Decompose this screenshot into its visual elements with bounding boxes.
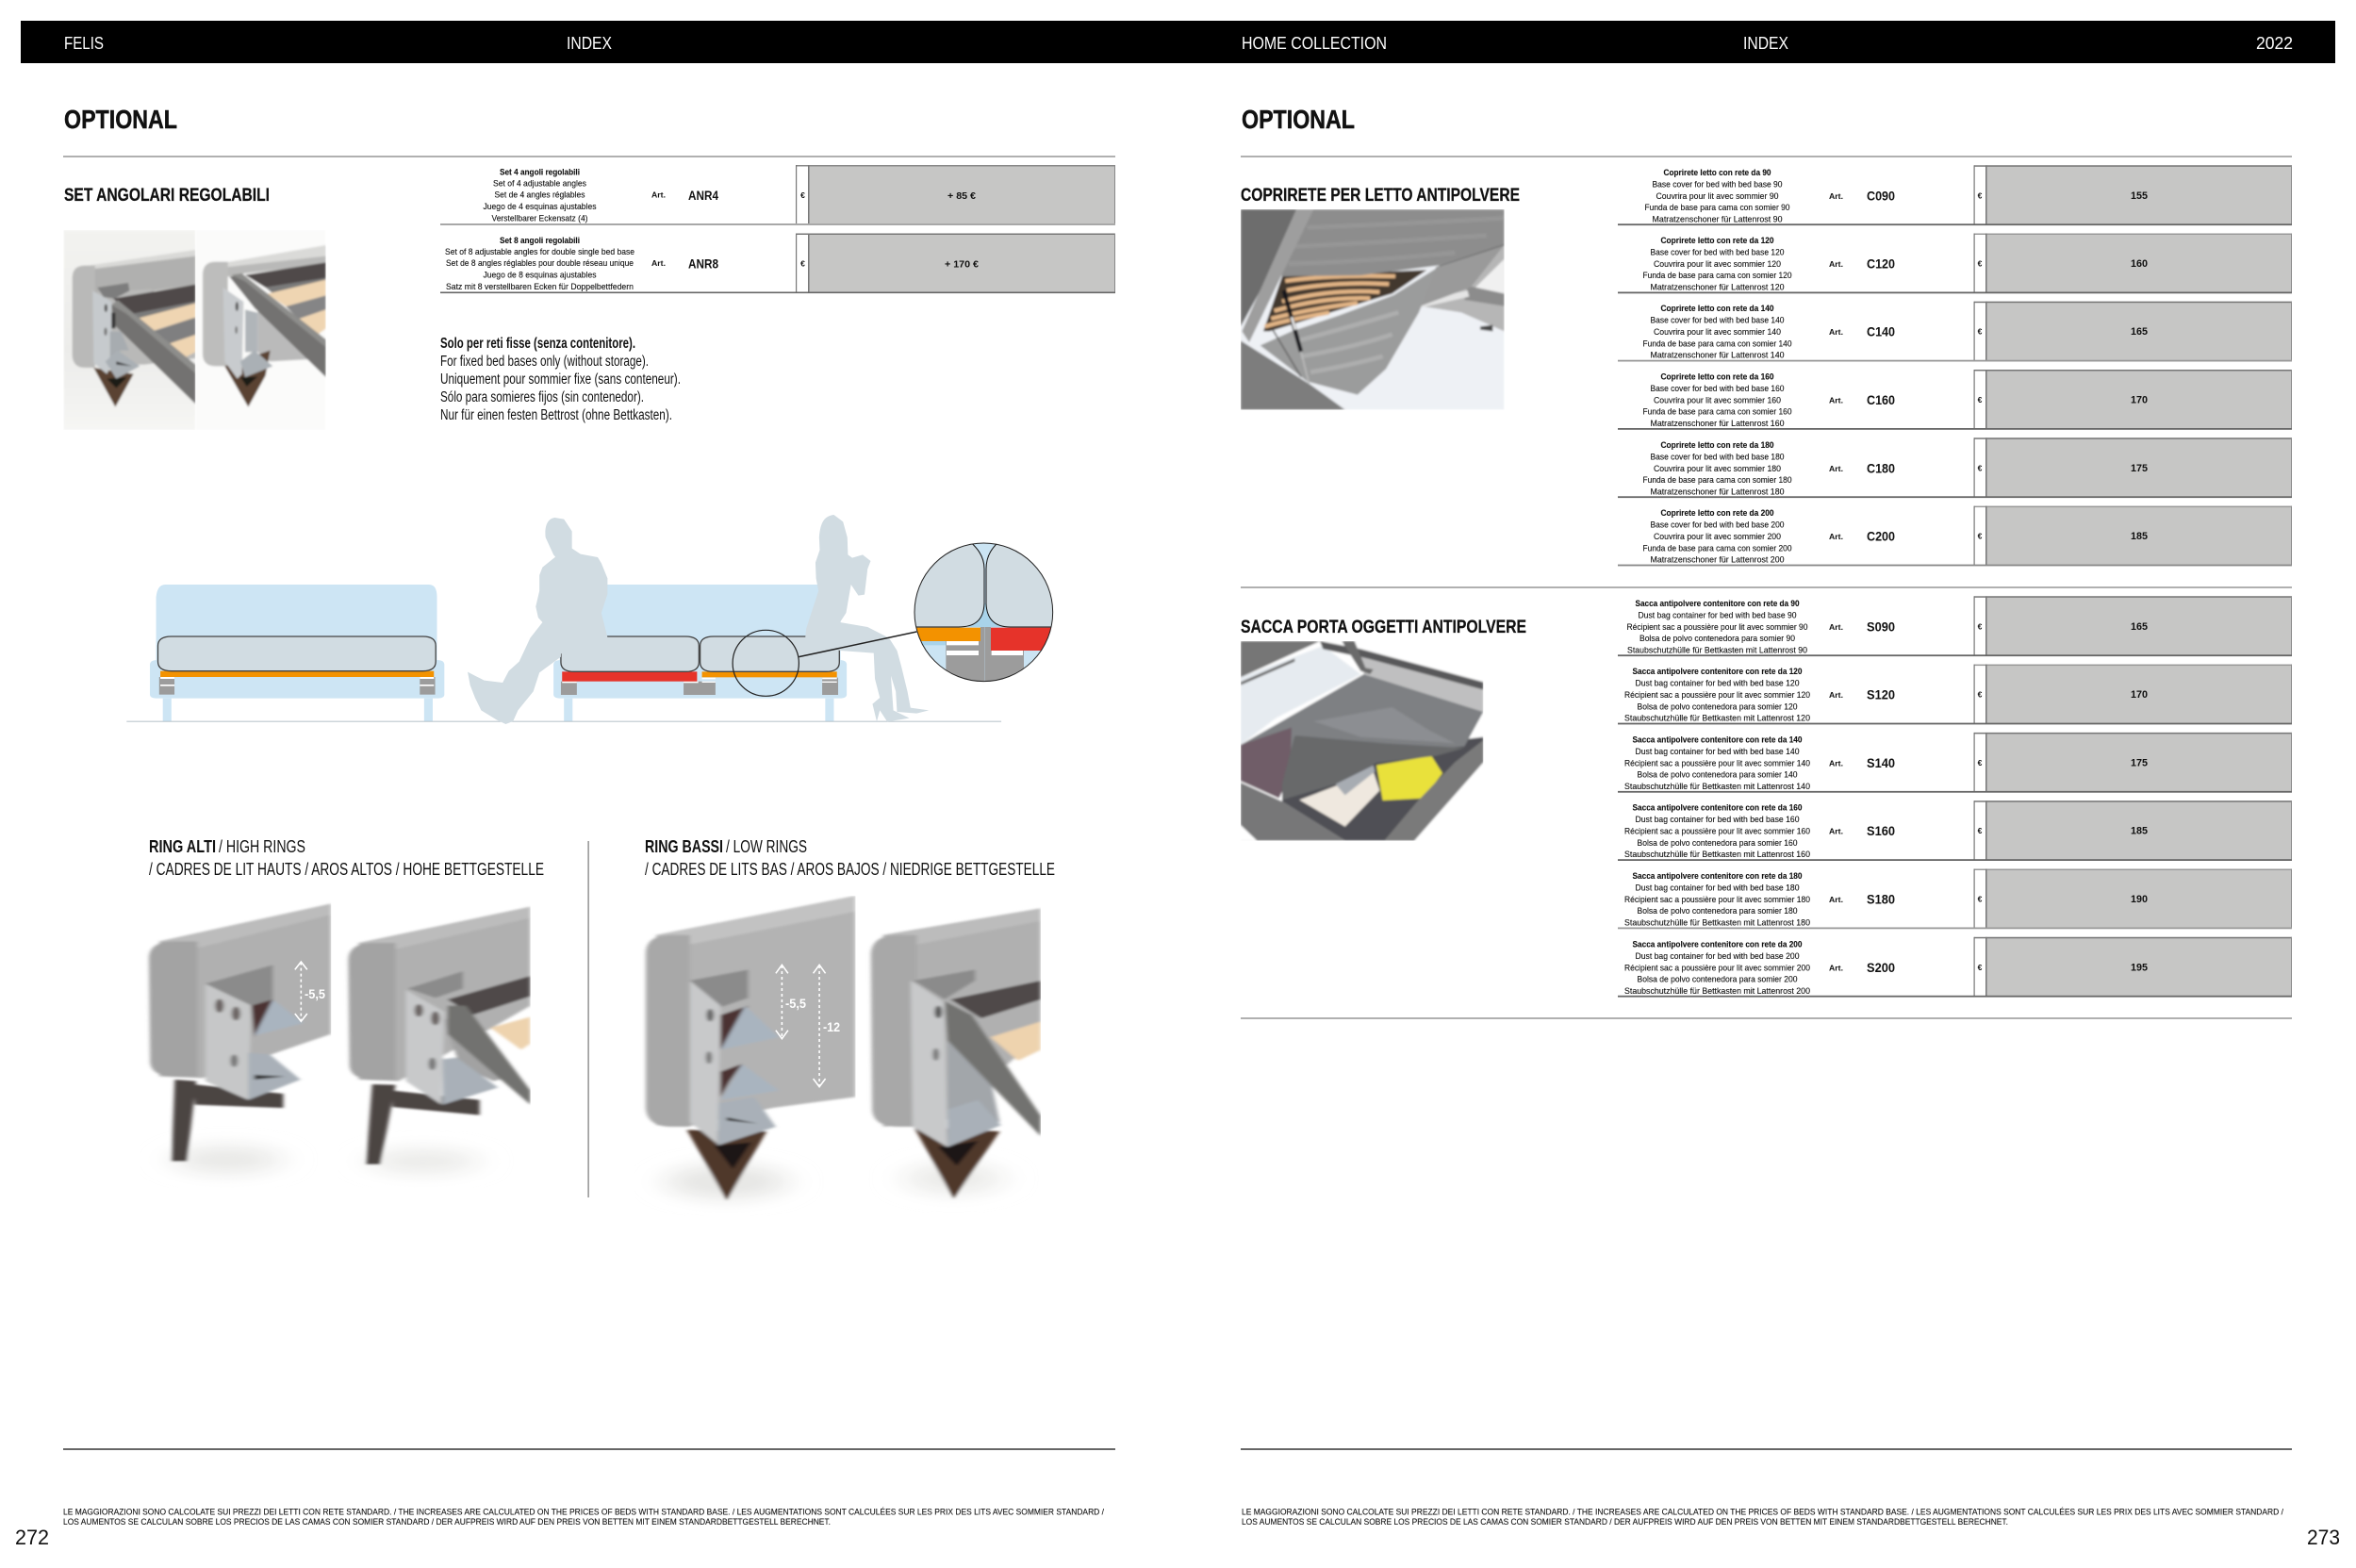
row: S200: S200 bbox=[1867, 960, 1895, 975]
header bar: HOME COLLECTION bbox=[1242, 34, 1387, 53]
row: S090: Art. bbox=[1829, 622, 1843, 632]
row: C180: Coprirete letto con rete da 180 bbox=[1661, 440, 1774, 451]
row: S180: S180 bbox=[1867, 892, 1895, 907]
heading: set angolari regolabili: SET ANGOLARI REGOLABILI bbox=[64, 186, 270, 206]
row: S120: Récipient sac a poussière pour lit avec sommier 120 bbox=[1624, 690, 1810, 701]
row: C180: Art. bbox=[1829, 464, 1843, 473]
row: ANR8: Satz mit 8 verstellbaren Ecken für Doppelbettfedern bbox=[446, 282, 634, 292]
table: sacca bbox=[1618, 596, 2292, 998]
row: S120: Art. bbox=[1829, 690, 1843, 700]
photos: ring brackets bbox=[149, 896, 1041, 1200]
row: S200: Bolsa de polvo contenedora para somier 200 bbox=[1637, 974, 1797, 984]
text block: fixed bed bases note: Uniquement pour sommier fixe (sans conteneur). bbox=[440, 371, 681, 388]
text block: fixed bed bases note: For fixed bed bases only (without storage). bbox=[440, 354, 649, 370]
row: S120: Bolsa de polvo contenedora para somier 120 bbox=[1637, 701, 1797, 712]
row: S140 bbox=[1618, 733, 2292, 793]
row: S140: Sacca antipolvere contenitore con rete da 140 bbox=[1633, 734, 1803, 745]
row: S090: Récipient sac a poussière pour lit avec sommier 90 bbox=[1627, 622, 1808, 633]
row: C090: Coprirete letto con rete da 90 bbox=[1663, 168, 1771, 178]
row: C090: Base cover for bed with bed base 90 bbox=[1652, 179, 1782, 190]
photo: adjustable angle brackets bbox=[63, 230, 326, 430]
row: C090 bbox=[1618, 165, 2292, 225]
row: C120: 160 bbox=[2131, 258, 2148, 270]
photo: low ring, with frame bbox=[871, 908, 1041, 1199]
row: C090: Matratzenschoner für Lattenrost 90 bbox=[1652, 214, 1782, 224]
row: S090: Bolsa de polvo contenedora para somier 90 bbox=[1639, 634, 1795, 644]
row: C140 bbox=[1618, 302, 2292, 362]
row: C160: Coprirete letto con rete da 160 bbox=[1661, 371, 1774, 383]
table: coprirete bbox=[1618, 165, 2292, 566]
row: S180: Bolsa de polvo contenedora para somier 180 bbox=[1637, 906, 1797, 916]
magnifier: small circle bbox=[733, 630, 799, 696]
row: S090 bbox=[1618, 596, 2292, 656]
row: C180: C180 bbox=[1867, 460, 1895, 475]
silhouette: woman bbox=[805, 515, 929, 721]
row: ANR4: € bbox=[800, 190, 805, 200]
row: C140: Coprirete letto con rete da 140 bbox=[1661, 304, 1774, 314]
row: S140: Récipient sac a poussière pour lit avec sommier 140 bbox=[1624, 758, 1810, 768]
row: S160: Dust bag container for bed with bed base 160 bbox=[1635, 815, 1799, 825]
row: S090: 165 bbox=[2131, 621, 2148, 633]
text block: fixed bed bases note bbox=[440, 336, 681, 423]
row: S140: S140 bbox=[1867, 755, 1895, 770]
row: C120: Funda de base para cama con somier 120 bbox=[1642, 271, 1791, 281]
heading: ring alti: / HIGH RINGS bbox=[219, 837, 305, 856]
page number 273: 273 bbox=[2307, 1526, 2340, 1549]
row: S120: Staubschutzhülle für Bettkasten mit Lattenrost 120 bbox=[1624, 714, 1810, 724]
photo: low ring, bracket bbox=[646, 896, 855, 1200]
row: C120: Art. bbox=[1829, 259, 1843, 269]
row: S180: € bbox=[1978, 894, 1983, 903]
row: C140: € bbox=[1978, 327, 1983, 337]
footnote: right bbox=[1242, 1507, 2283, 1527]
heading: ring alti: RING ALTI bbox=[149, 837, 216, 856]
row: S120: € bbox=[1978, 690, 1983, 700]
row: S120: Dust bag container for bed with bed base 120 bbox=[1635, 679, 1799, 689]
row: C120: Coprirete letto con rete da 120 bbox=[1661, 236, 1774, 246]
row: S200: Sacca antipolvere contenitore con rete da 200 bbox=[1633, 939, 1803, 949]
header bar: INDEX bbox=[1743, 34, 1788, 53]
label: -12 low ring: -12 bbox=[823, 1019, 840, 1034]
row: S160: Récipient sac a poussière pour lit avec sommier 160 bbox=[1624, 827, 1810, 837]
row: C090: Couvrira pour lit avec sommier 90 bbox=[1656, 191, 1778, 202]
row: S120 bbox=[1618, 665, 2292, 724]
row: C090: 155 bbox=[2131, 190, 2148, 202]
footnote: left: LE MAGGIORAZIONI SONO CALCOLATE SUI PREZZI DEI LETTI CON RETE STANDARD. / THE INCREASES ARE CALCULATED ON THE PRICES OF BEDS WITH STANDARD BASE. / LES AUGMENTATIONS SONT CALCULÉES SUR LES PRIX DES LITS AVEC SOMMIER STANDARD / bbox=[63, 1507, 1104, 1518]
row: C140: Matratzenschoner für Lattenrost 140 bbox=[1650, 351, 1784, 361]
row: S160: € bbox=[1978, 826, 1983, 835]
heading: sacca: SACCA PORTA OGGETTI ANTIPOLVERE bbox=[1241, 618, 1526, 637]
row: C200: C200 bbox=[1867, 529, 1895, 544]
text block: fixed bed bases note: Nur für einen festen Bettrost (ohne Bettkasten). bbox=[440, 407, 672, 423]
header bar bbox=[21, 21, 2335, 63]
row: C180: 175 bbox=[2131, 463, 2148, 474]
row: C200: 185 bbox=[2131, 531, 2148, 542]
row: C200: Coprirete letto con rete da 200 bbox=[1661, 508, 1774, 519]
diagram: beds with silhouettes bbox=[126, 515, 1001, 724]
silhouette: man bbox=[468, 518, 607, 724]
heading: ring bassi: / LOW RINGS bbox=[726, 837, 807, 856]
row: S180: Art. bbox=[1829, 895, 1843, 904]
row: S160: 185 bbox=[2131, 826, 2148, 837]
row: ANR8: € bbox=[800, 258, 805, 268]
row: S180: Récipient sac a poussière pour lit avec sommier 180 bbox=[1624, 895, 1810, 905]
row: C200: Matratzenschoner für Lattenrost 200 bbox=[1650, 555, 1784, 566]
row: S160: S160 bbox=[1867, 823, 1895, 838]
row: S090: € bbox=[1978, 621, 1983, 631]
bed: with red raised frame bbox=[553, 585, 847, 721]
row: C120: Base cover for bed with bed base 120 bbox=[1650, 247, 1784, 258]
photo: bed base dust cover bbox=[1241, 209, 1505, 410]
row: C160: Base cover for bed with bed base 160 bbox=[1650, 384, 1784, 394]
row: S200: € bbox=[1978, 963, 1983, 972]
row: C200: Art. bbox=[1829, 532, 1843, 541]
footnote: left bbox=[63, 1507, 1104, 1527]
row: C140: Funda de base para cama con somier 140 bbox=[1642, 338, 1791, 349]
row: C160: Matratzenschoner für Lattenrost 160 bbox=[1650, 419, 1784, 429]
row: S140: Dust bag container for bed with bed base 140 bbox=[1635, 747, 1799, 757]
footnote: left: LOS AUMENTOS SE CALCULAN SOBRE LOS PRECIOS DE LAS CAMAS CON SOMIER STANDARD / DER AUFPREIS WIRD AUF DEN PREIS VON BETTEN MIT EINEM STANDARDBETTGESTELL BERECHNET. bbox=[63, 1517, 831, 1527]
page number 272: 272 bbox=[15, 1526, 49, 1549]
row: ANR4: Verstellbarer Eckensatz (4) bbox=[492, 213, 588, 224]
label: -5,5 high ring: -5,5 bbox=[305, 986, 325, 1001]
magnifier: connector bbox=[799, 632, 916, 657]
row: S140: Art. bbox=[1829, 758, 1843, 767]
row: S140: 175 bbox=[2131, 757, 2148, 768]
row: ANR4: Art. bbox=[651, 190, 666, 200]
title: right page: OPTIONAL bbox=[1242, 105, 1355, 134]
footer rule right bbox=[1241, 1448, 2292, 1450]
row: ANR8: Art. bbox=[651, 258, 666, 268]
row: ANR4: ANR4 bbox=[688, 188, 718, 203]
table: set angolari bbox=[440, 165, 1115, 293]
photo: dust bag in storage box bbox=[1241, 641, 1483, 841]
photo: high ring, bracket bbox=[149, 903, 331, 1174]
row: C200: Couvrira pour lit avec sommier 200 bbox=[1654, 532, 1781, 542]
row: S180: Dust bag container for bed with bed base 180 bbox=[1635, 883, 1799, 894]
row: S090: Staubschutzhülle für Bettkasten mit Lattenrost 90 bbox=[1627, 645, 1807, 655]
row: ANR4: Set de 4 angles réglables bbox=[494, 190, 585, 200]
magnifier: enlarged detail bbox=[914, 543, 1054, 683]
row: ANR4: Set of 4 adjustable angles bbox=[493, 179, 586, 189]
row: S160 bbox=[1618, 801, 2292, 861]
title: left page: OPTIONAL bbox=[64, 105, 177, 134]
row: S160: Art. bbox=[1829, 827, 1843, 836]
row: C180: Matratzenschoner für Lattenrost 180 bbox=[1650, 487, 1784, 497]
row: S120: S120 bbox=[1867, 687, 1895, 702]
row: ANR8 bbox=[440, 234, 1115, 293]
row: S200: Dust bag container for bed with bed base 200 bbox=[1635, 951, 1799, 962]
row: ANR4: Set 4 angoli regolabili bbox=[500, 168, 580, 177]
row: C140: Base cover for bed with bed base 140 bbox=[1650, 316, 1784, 326]
label: -5,5 low ring: -5,5 bbox=[785, 996, 806, 1011]
row: ANR4 bbox=[440, 165, 1115, 225]
bed: standard height bbox=[150, 585, 444, 721]
row: S140: Staubschutzhülle für Bettkasten mit Lattenrost 140 bbox=[1624, 782, 1810, 792]
row: C140: 165 bbox=[2131, 326, 2148, 338]
photo: high ring, with frame bbox=[348, 907, 531, 1174]
row: S200 bbox=[1618, 937, 2292, 998]
row: C090: C090 bbox=[1867, 188, 1895, 203]
footnote: right: LOS AUMENTOS SE CALCULAN SOBRE LOS PRECIOS DE LAS CAMAS CON SOMIER STANDARD / DER AUFPREIS WIRD AUF DEN PREIS VON BETTEN MIT EINEM STANDARDBETTGESTELL BERECHNET. bbox=[1242, 1517, 2008, 1527]
row: ANR4: + 85 € bbox=[947, 191, 976, 202]
row: C140: C140 bbox=[1867, 324, 1895, 339]
row: C180: € bbox=[1978, 463, 1983, 472]
header bar: FELIS bbox=[64, 34, 104, 53]
heading: ring alti bbox=[149, 837, 544, 879]
text block: fixed bed bases note: Solo per reti fisse (senza contenitore). bbox=[440, 336, 635, 352]
row: C160: € bbox=[1978, 395, 1983, 404]
row: ANR8: ANR8 bbox=[688, 256, 718, 272]
row: C160: 170 bbox=[2131, 394, 2148, 405]
text block: fixed bed bases note: Sólo para somieres fijos (sin contenedor). bbox=[440, 389, 644, 405]
row: ANR8: Set of 8 adjustable angles for double single bed base bbox=[445, 247, 634, 257]
row: S180: Staubschutzhülle für Bettkasten mit Lattenrost 180 bbox=[1624, 918, 1810, 928]
row: ANR8: + 170 € bbox=[945, 260, 979, 270]
row: C180: Couvrira pour lit avec sommier 180 bbox=[1654, 464, 1781, 474]
row: C160 bbox=[1618, 370, 2292, 430]
row: C180 bbox=[1618, 437, 2292, 498]
row: C140: Couvrira pour lit avec sommier 140 bbox=[1654, 327, 1781, 338]
row: C160: Couvrira pour lit avec sommier 160 bbox=[1654, 396, 1781, 405]
row: ANR8: Juego de 8 esquinas ajustables bbox=[483, 270, 597, 281]
row: S200: Récipient sac a poussière pour lit avec sommier 200 bbox=[1624, 963, 1810, 973]
row: C160: C160 bbox=[1867, 392, 1895, 407]
row: S090: S090 bbox=[1867, 619, 1895, 634]
row: C200: € bbox=[1978, 532, 1983, 541]
row: S160: Sacca antipolvere contenitore con rete da 160 bbox=[1633, 803, 1803, 814]
row: C160: Art. bbox=[1829, 396, 1843, 405]
row: C120 bbox=[1618, 234, 2292, 293]
row: S140: € bbox=[1978, 758, 1983, 767]
row: S120: 170 bbox=[2131, 689, 2148, 701]
row: C120: Matratzenschoner für Lattenrost 120 bbox=[1650, 283, 1784, 292]
annotations: ring height arrows bbox=[295, 962, 826, 1087]
row: S160: Bolsa de polvo contenedora para somier 160 bbox=[1637, 838, 1797, 849]
row: C140: Art. bbox=[1829, 327, 1843, 337]
row: S140: Bolsa de polvo contenedora para somier 140 bbox=[1637, 770, 1797, 781]
row: C120: C120 bbox=[1867, 256, 1895, 272]
row: C200 bbox=[1618, 506, 2292, 566]
heading: ring alti: / CADRES DE LIT HAUTS / AROS ALTOS / HOHE BETTGESTELLE bbox=[149, 860, 544, 879]
row: S200: Staubschutzhülle für Bettkasten mit Lattenrost 200 bbox=[1624, 986, 1810, 997]
row: C160: Funda de base para cama con somier 160 bbox=[1642, 407, 1791, 418]
row: C120: Couvrira pour lit avec sommier 120 bbox=[1654, 259, 1781, 270]
row: S160: Staubschutzhülle für Bettkasten mit Lattenrost 160 bbox=[1624, 850, 1810, 860]
row: S090: Sacca antipolvere contenitore con rete da 90 bbox=[1635, 599, 1799, 609]
header bar: 2022 bbox=[2256, 34, 2293, 53]
row: C180: Funda de base para cama con somier 180 bbox=[1642, 475, 1791, 486]
arrow: -5,5 low ring bbox=[776, 965, 788, 1039]
arrow: -5,5 high ring bbox=[295, 962, 307, 1021]
row: S120: Sacca antipolvere contenitore con rete da 120 bbox=[1633, 667, 1803, 677]
arrow: -12 low ring bbox=[814, 965, 826, 1087]
row: S200: Art. bbox=[1829, 963, 1843, 972]
heading: ring bassi bbox=[645, 837, 1055, 879]
row: C090: Funda de base para cama con somier 90 bbox=[1644, 203, 1789, 213]
heading: ring bassi: RING BASSI bbox=[645, 837, 723, 856]
row: ANR4: Juego de 4 esquinas ajustables bbox=[483, 202, 597, 212]
row: ANR8: Set 8 angoli regolabili bbox=[500, 236, 580, 246]
heading: ring bassi: / CADRES DE LITS BAS / AROS BAJOS / NIEDRIGE BETTGESTELLE bbox=[645, 860, 1055, 879]
heading: coprirete: COPRIRETE PER LETTO ANTIPOLVERE bbox=[1241, 186, 1520, 206]
row: C090: € bbox=[1978, 190, 1983, 200]
footer rule left bbox=[63, 1448, 1115, 1450]
row: C180: Base cover for bed with bed base 180 bbox=[1650, 452, 1784, 462]
row: C200: Base cover for bed with bed base 200 bbox=[1650, 520, 1784, 531]
row: S180: Sacca antipolvere contenitore con rete da 180 bbox=[1633, 871, 1803, 882]
row: S180: 190 bbox=[2131, 894, 2148, 905]
row: S180 bbox=[1618, 869, 2292, 929]
header bar: INDEX bbox=[567, 34, 612, 53]
row: S090: Dust bag container for bed with bed base 90 bbox=[1639, 610, 1797, 620]
row: C120: € bbox=[1978, 258, 1983, 268]
row: C090: Art. bbox=[1829, 191, 1843, 201]
row: S200: 195 bbox=[2131, 962, 2148, 973]
row: ANR8: Set de 8 angles réglables pour double réseau unique bbox=[446, 258, 634, 269]
row: C200: Funda de base para cama con somier 200 bbox=[1642, 543, 1791, 553]
